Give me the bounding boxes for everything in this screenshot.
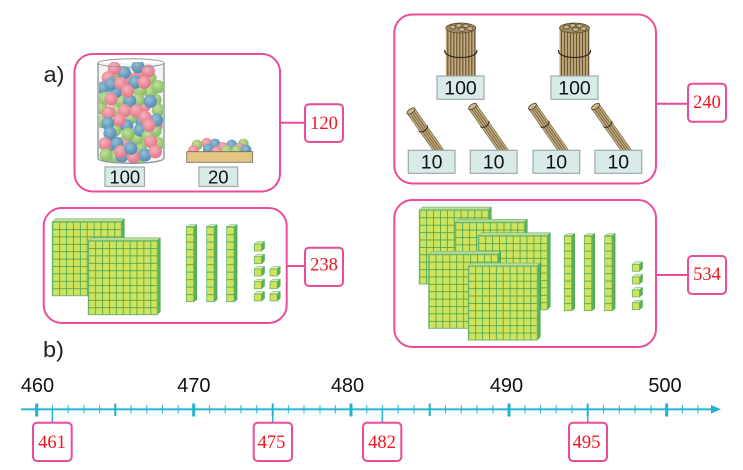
- label: 100 second: 100: [558, 77, 591, 99]
- label: 10 fourth: [595, 150, 642, 174]
- icon: straw bundle 10 third: [527, 102, 569, 155]
- answer: 482: 482: [368, 433, 396, 453]
- label: 100: 100: [444, 77, 477, 99]
- answer: 495: 495: [573, 433, 600, 453]
- connector and answer: 534: 534: [693, 265, 721, 285]
- panel: blocks 238: [44, 208, 287, 323]
- icon: unit cubes: [254, 242, 280, 301]
- label: part b: b): [43, 337, 64, 362]
- icon: straw bundle 10: [406, 106, 447, 160]
- tick labels: [21, 375, 682, 397]
- icon: straw bundle 100: [445, 23, 477, 77]
- tick labels: 500: [648, 375, 682, 397]
- connector and answer: 238: [287, 248, 343, 286]
- answer: 495: [569, 423, 607, 461]
- label: 20: 20: [208, 166, 229, 187]
- tick labels: 460: [21, 375, 54, 397]
- icon: straw bundle 100 second: [558, 23, 591, 77]
- connector and answer: 120: [280, 104, 343, 142]
- label: 10 fourth: 10: [607, 152, 629, 174]
- answer: 475: 475: [258, 433, 285, 453]
- icon: unit cubes: [632, 262, 642, 310]
- connector and answer: 238: 238: [310, 256, 338, 276]
- connector and answer: 534: [656, 256, 726, 294]
- label: 10 third: [533, 150, 580, 174]
- answer: 461: [33, 423, 72, 461]
- label: 100: 100: [109, 166, 140, 187]
- label: part a: a): [44, 62, 64, 87]
- answer: 461: 461: [38, 433, 66, 453]
- panel: straws: [394, 14, 656, 184]
- icon: straw bundle 10 fourth: [590, 102, 632, 155]
- panel: blocks 534: [394, 200, 656, 347]
- label: 10: 10: [421, 152, 443, 174]
- label: 20: [199, 166, 238, 187]
- label: 100 second: [551, 76, 598, 99]
- number line: [21, 375, 721, 423]
- tick labels: 480: [331, 375, 364, 397]
- label: 10 third: 10: [545, 152, 567, 174]
- answer: 482: [363, 423, 401, 461]
- icon: hundreds flats: [52, 219, 160, 315]
- icon: straw bundle 10 second: [467, 102, 509, 155]
- answer: 475: [254, 423, 292, 461]
- panel: marbles: [74, 54, 280, 192]
- icon: jar of marbles: [94, 59, 165, 165]
- connector and answer: 240: 240: [693, 93, 721, 113]
- connector and answer: 120: 120: [310, 114, 338, 134]
- tick labels: 490: [490, 375, 523, 397]
- icon: tens rods: [564, 234, 615, 311]
- label: 100: [437, 76, 484, 99]
- icon: hundreds flats: [419, 207, 550, 340]
- label: 10 second: 10: [483, 152, 505, 174]
- tick labels: 470: [177, 375, 210, 397]
- icon: tens rods: [186, 225, 237, 302]
- label: 10 second: [470, 150, 517, 174]
- connector and answer: 240: [656, 84, 726, 122]
- label: 10: [408, 150, 455, 174]
- icon: tray of marbles: [187, 138, 253, 162]
